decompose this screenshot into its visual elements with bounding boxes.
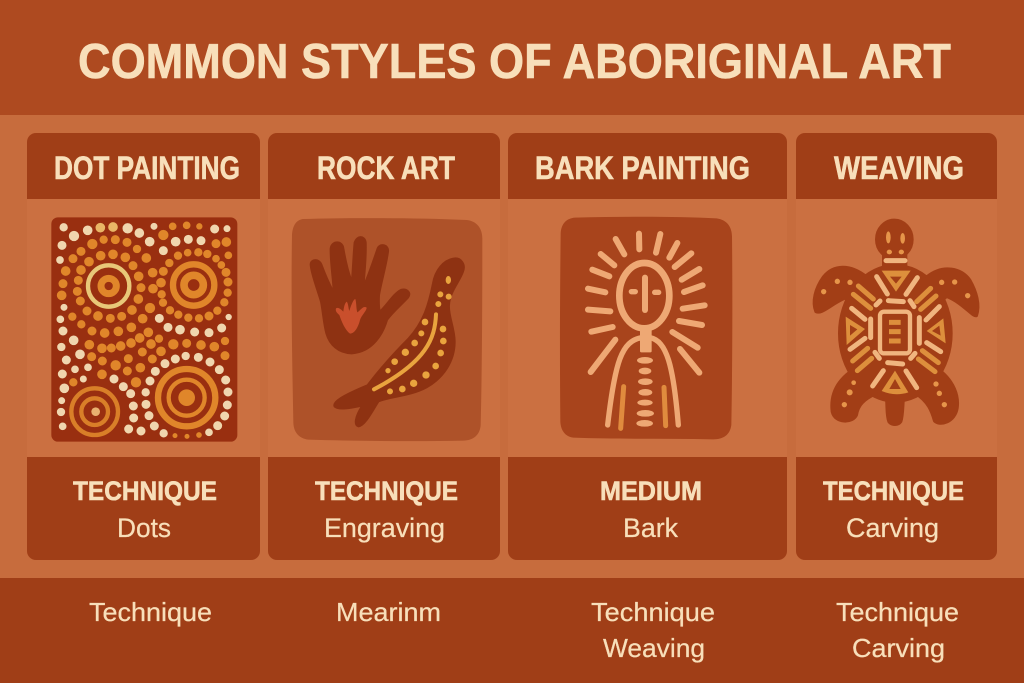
footer text: column 4: Technique — [836, 597, 959, 627]
medium label: bark: MEDIUM — [600, 476, 702, 506]
footer text: column 3: Technique — [591, 597, 715, 627]
heading: bark painting: BARK PAINTING — [535, 150, 750, 186]
heading: rock art — [268, 133, 500, 199]
panel: rock art — [268, 133, 500, 560]
panel: dot painting — [27, 133, 260, 560]
technique label: engraving: Engraving — [324, 513, 445, 543]
footer text: column 1: Technique — [89, 597, 212, 627]
artwork: figure on bark — [560, 217, 732, 439]
technique label: engraving — [268, 457, 500, 560]
technique label: carving: TECHNIQUE — [823, 476, 964, 506]
technique label: carving: Carving — [846, 513, 939, 543]
heading: dot painting: DOT PAINTING — [54, 150, 240, 186]
heading: bark painting — [508, 133, 787, 199]
heading: weaving — [796, 133, 997, 199]
technique label: carving — [796, 457, 997, 560]
title band — [0, 0, 1024, 115]
hand print — [310, 237, 410, 354]
technique label: dots — [27, 457, 260, 560]
footer text: column 2: Mearinm — [336, 597, 441, 627]
medium label: bark — [508, 457, 787, 560]
footer text: column 4 — [836, 597, 959, 663]
footer text: column 3: Weaving — [603, 633, 705, 663]
footer text: column 3 — [591, 597, 715, 663]
artwork: hand and seal on rock — [292, 218, 482, 441]
footer text: column 4: Carving — [852, 633, 945, 663]
artwork: concentric circles and dots — [51, 217, 237, 442]
technique label: engraving: TECHNIQUE — [315, 476, 458, 506]
title: COMMON STYLES OF ABORIGINAL ART — [78, 35, 951, 89]
footer band — [0, 578, 1024, 683]
panel: weaving — [796, 133, 997, 560]
small red hand — [336, 299, 367, 334]
heading: weaving: WEAVING — [834, 150, 964, 186]
heading: rock art: ROCK ART — [317, 150, 455, 186]
medium label: bark: Bark — [623, 513, 678, 543]
technique label: dots: Dots — [117, 513, 171, 543]
artwork: turtle — [814, 220, 978, 425]
technique label: dots: TECHNIQUE — [73, 476, 217, 506]
seal figure — [334, 258, 464, 427]
heading: dot painting — [27, 133, 260, 199]
panel: bark painting — [508, 133, 787, 560]
